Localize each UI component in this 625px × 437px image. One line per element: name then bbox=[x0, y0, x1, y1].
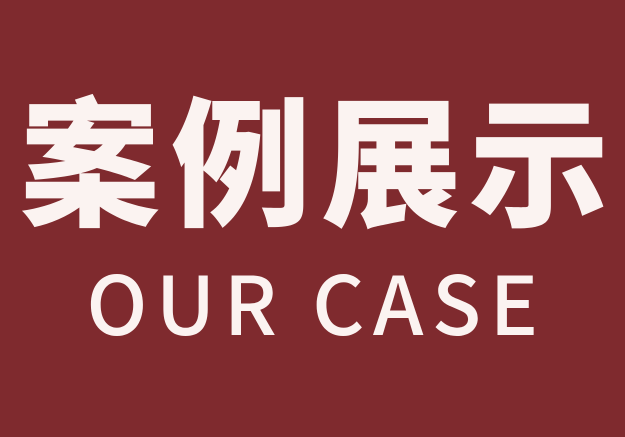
title: Chinese heading: 展 bbox=[321, 54, 461, 256]
title: Chinese heading: 示 bbox=[469, 54, 609, 256]
subtitle: English heading: OUR CASE bbox=[86, 242, 547, 359]
title: Chinese heading: 案 bbox=[20, 54, 160, 256]
title: Chinese heading: 例 bbox=[171, 54, 311, 256]
title: Chinese heading bbox=[20, 54, 609, 256]
